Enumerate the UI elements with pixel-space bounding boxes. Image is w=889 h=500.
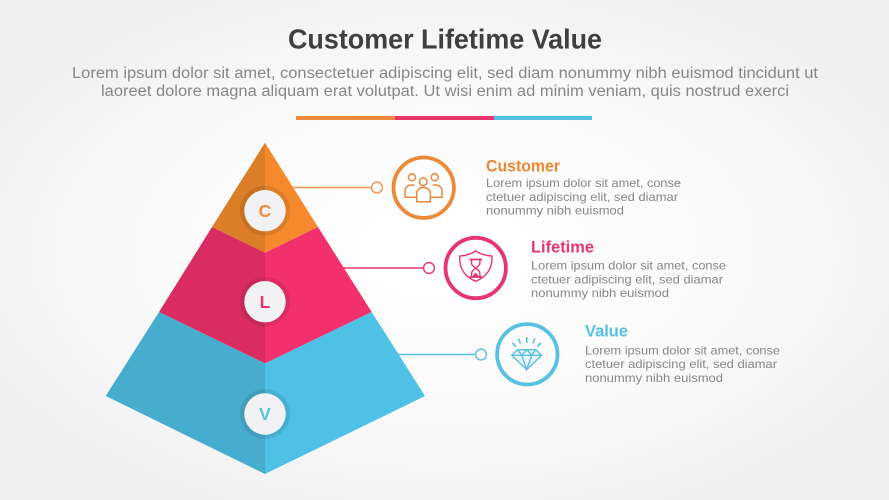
icon: diamond in ring <box>497 324 558 384</box>
text block: customer: nonummy nibh euismod <box>486 204 624 218</box>
text block: lifetime: nonummy nibh euismod <box>531 286 669 300</box>
text block: value: nonummy nibh euismod <box>585 371 723 385</box>
pyramid tier: customer <box>212 143 318 253</box>
text block: lifetime <box>531 238 726 300</box>
text block: customer: ctetuer adipiscing elit, sed diamar <box>486 190 678 204</box>
connector: value <box>395 349 486 360</box>
text block: lifetime: ctetuer adipiscing elit, sed diamar <box>531 272 723 286</box>
text block: value: Value <box>585 322 628 341</box>
text block: customer <box>486 157 681 218</box>
icon: shield with hourglass in ring <box>446 238 506 298</box>
badge: V: V <box>259 404 271 424</box>
title: Customer Lifetime Value <box>288 24 602 54</box>
subtitle text: Lorem ipsum dolor sit amet, consectetuer adipiscing elit, sed diam nonummy nibh euismod tincidunt ut <box>72 65 819 82</box>
text block: customer: Lorem ipsum dolor sit amet, conse <box>486 176 681 190</box>
text block: customer: Customer <box>486 157 560 176</box>
badge: L: L <box>260 292 271 312</box>
text block: lifetime: Lorem ipsum dolor sit amet, conse <box>531 258 726 272</box>
pyramid tier: value <box>106 312 425 474</box>
badge: C <box>240 186 290 236</box>
badge: L <box>240 277 290 327</box>
badge: V <box>240 389 290 439</box>
icon: customer group in ring <box>394 158 454 218</box>
connector: lifetime <box>340 263 434 273</box>
text block: value <box>585 322 780 385</box>
subtitle text: laoreet dolore magna aliquam erat volutpat. Ut wisi enim ad minim veniam, quis nostrud exerci <box>101 83 789 100</box>
pyramid tier: lifetime <box>159 227 372 364</box>
text block: value: Lorem ipsum dolor sit amet, conse <box>585 344 780 358</box>
badge: C: C <box>259 201 272 221</box>
text block: lifetime: Lifetime <box>531 238 594 257</box>
subtitle text <box>72 65 819 100</box>
pyramid <box>106 143 425 474</box>
connector: customer <box>290 182 382 193</box>
tricolor divider bar <box>296 116 592 120</box>
text block: value: ctetuer adipiscing elit, sed diamar <box>585 357 777 371</box>
